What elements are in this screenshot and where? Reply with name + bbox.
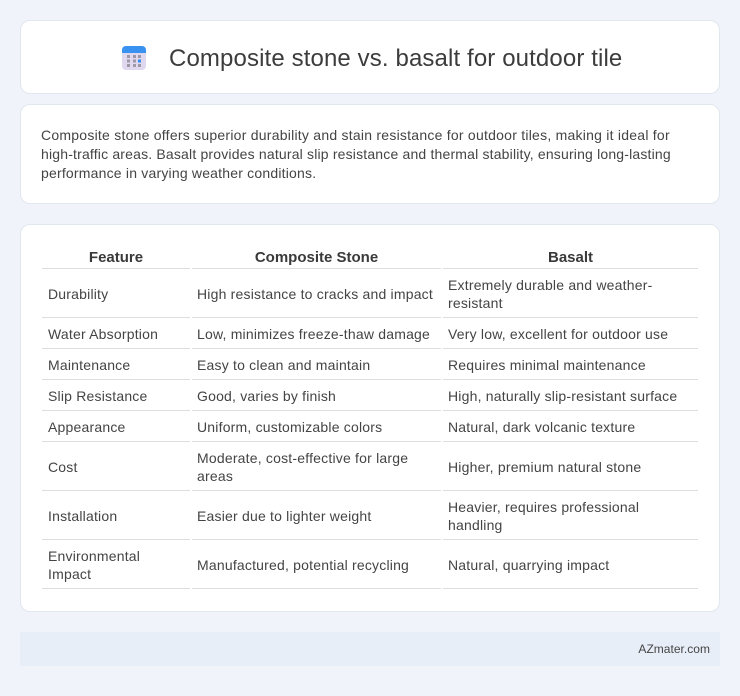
table: Natural, dark volcanic texture bbox=[448, 419, 635, 435]
row: Environmental Impact bbox=[48, 548, 140, 582]
intro paragraph: performance in varying weather conditions. bbox=[41, 165, 316, 181]
row: Cost: Cost bbox=[48, 459, 78, 475]
panel: comparison table bbox=[20, 224, 720, 612]
table: Good, varies by finish bbox=[197, 388, 336, 404]
row: Appearance: Appearance bbox=[48, 419, 126, 435]
table: Heavier, requires professional bbox=[448, 499, 639, 515]
row: Environmental Impact: Impact bbox=[48, 566, 91, 582]
table: handling bbox=[448, 517, 503, 533]
row: Water Absorption: Water Absorption bbox=[48, 326, 158, 342]
table: Higher, premium natural stone bbox=[448, 459, 641, 475]
title: Composite stone vs. basalt for outdoor tile bbox=[169, 45, 622, 72]
footer credit: AZmater.com bbox=[638, 642, 710, 656]
column header: Composite Stone: Composite Stone bbox=[255, 249, 378, 266]
table: Easy to clean and maintain bbox=[197, 357, 370, 373]
table bbox=[42, 249, 698, 589]
table: High resistance to cracks and impact bbox=[197, 286, 433, 302]
footer bar bbox=[20, 632, 720, 666]
table: areas bbox=[197, 468, 233, 484]
table: Extremely durable and weather- bbox=[448, 277, 652, 293]
panel: title card bbox=[20, 20, 720, 94]
icon: calendar grid bbox=[122, 46, 146, 70]
table: Manufactured, potential recycling bbox=[197, 557, 409, 573]
row: Slip Resistance: Slip Resistance bbox=[48, 388, 148, 404]
table: Low, minimizes freeze-thaw damage bbox=[197, 326, 430, 342]
panel: intro text bbox=[20, 104, 720, 204]
row: Maintenance: Maintenance bbox=[48, 357, 130, 373]
intro paragraph: Composite stone offers superior durability and stain resistance for outdoor tiles, making it ideal for bbox=[41, 127, 670, 143]
intro paragraph: high-traffic areas. Basalt provides natural slip resistance and thermal stability, ensuring long-lasting bbox=[41, 146, 671, 162]
row: Durability: Durability bbox=[48, 286, 108, 302]
table: High, naturally slip-resistant surface bbox=[448, 388, 677, 404]
table: Uniform, customizable colors bbox=[197, 419, 382, 435]
table: Easier due to lighter weight bbox=[197, 508, 371, 524]
table: Very low, excellent for outdoor use bbox=[448, 326, 668, 342]
table: Requires minimal maintenance bbox=[448, 357, 646, 373]
row: Installation: Installation bbox=[48, 508, 117, 524]
column header: Basalt: Basalt bbox=[548, 249, 593, 266]
row: Environmental Impact: Environmental bbox=[48, 548, 140, 564]
table: Moderate, cost-effective for large bbox=[197, 450, 408, 466]
table: Natural, quarrying impact bbox=[448, 557, 609, 573]
intro paragraph bbox=[41, 127, 671, 181]
column header: Feature: Feature bbox=[89, 249, 143, 266]
table: resistant bbox=[448, 295, 503, 311]
